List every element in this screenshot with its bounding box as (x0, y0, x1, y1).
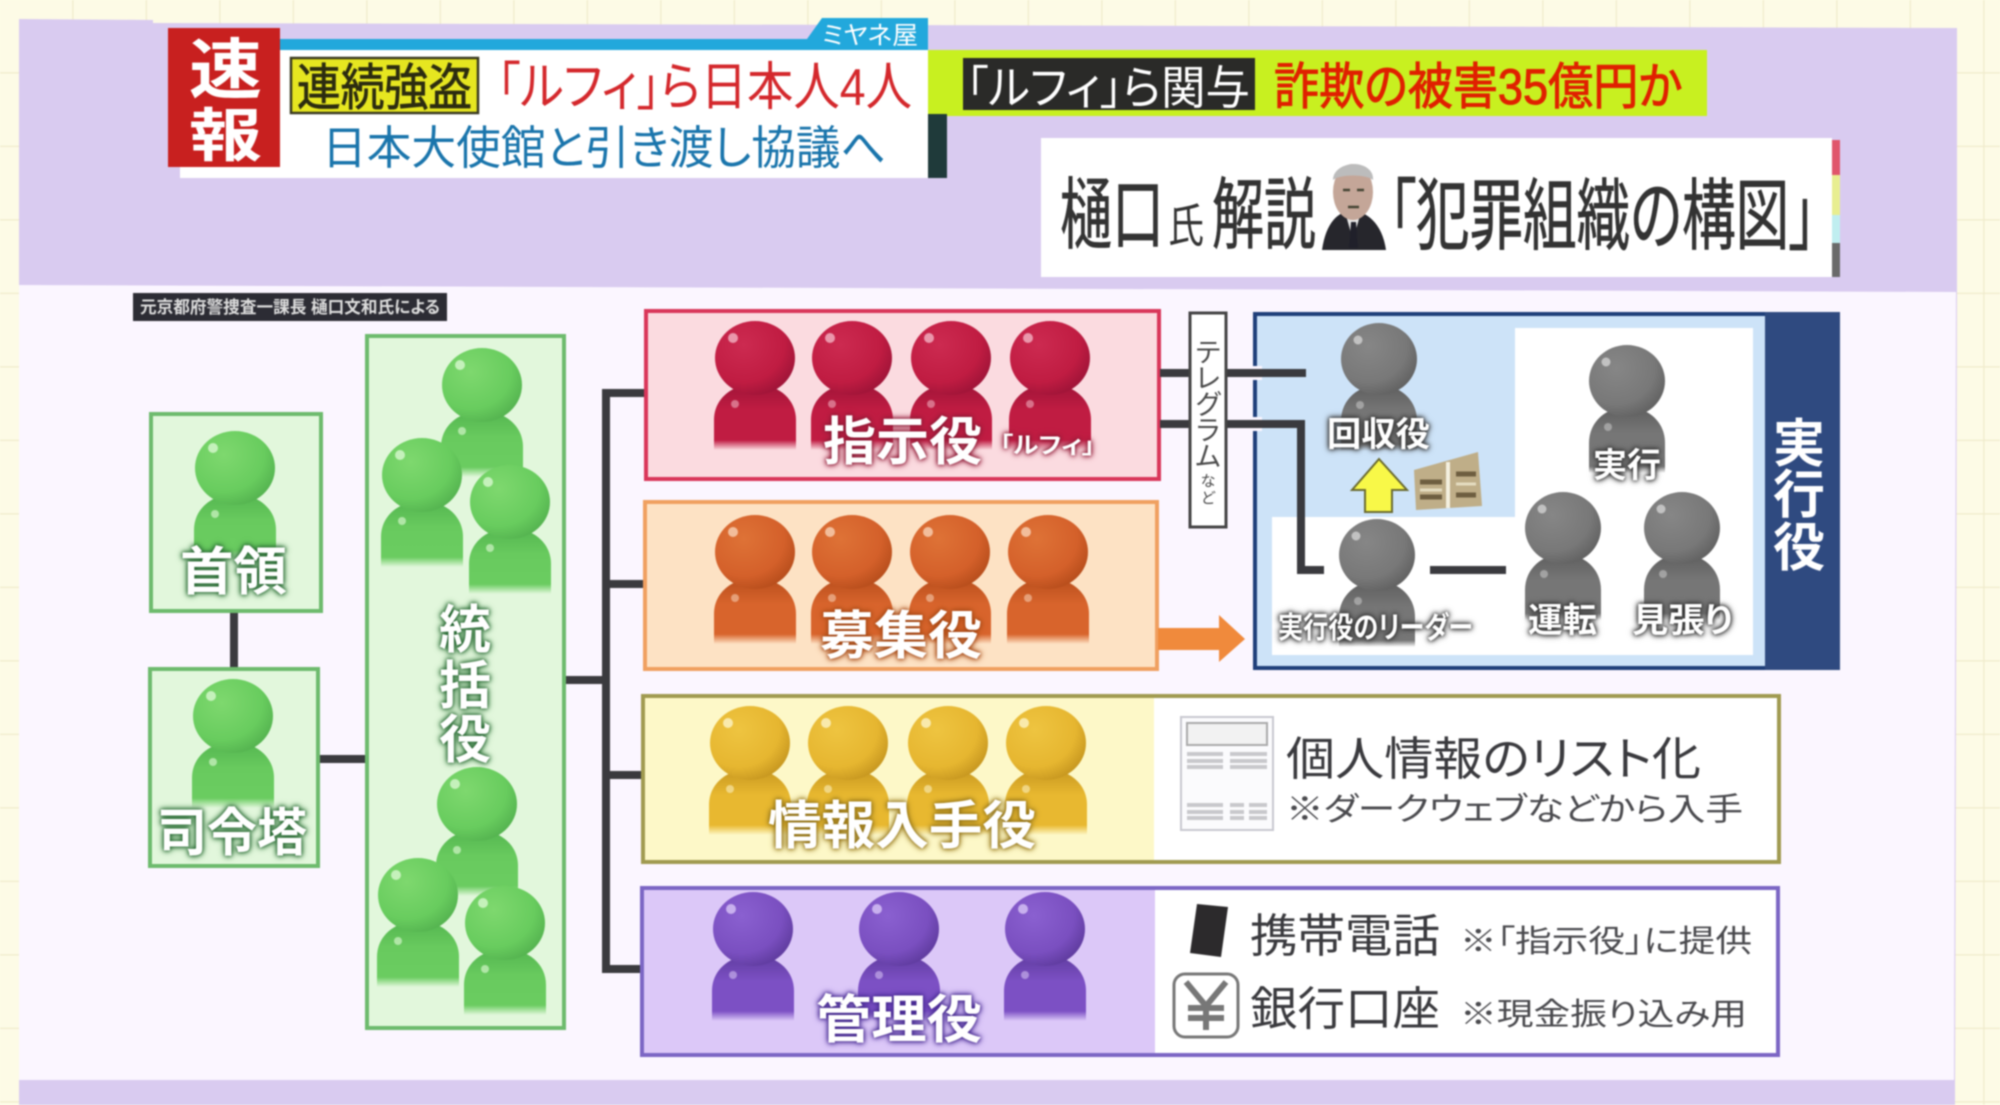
label: 募集役 (820, 608, 982, 666)
panel: recruiters (645, 502, 1157, 669)
icon: document list (1181, 717, 1273, 830)
executor leader (1278, 519, 1473, 647)
label: 首領 (180, 544, 287, 602)
ticker: lime side bar (928, 50, 1707, 116)
telegram box: テレグラム (1195, 338, 1221, 472)
connector lines of the organization (234, 393, 645, 969)
text: list of personal data: 個人情報のリスト化 (1286, 733, 1701, 785)
person icons (709, 706, 1087, 835)
lookout: 見張り (1632, 602, 1733, 640)
title: speaker name: 樋口 (1060, 171, 1164, 259)
label: 司令塔 (157, 805, 307, 863)
panel: boss (151, 414, 321, 611)
ticker: white banner (180, 50, 928, 178)
executors: navy side label: 実行役 (1773, 416, 1825, 578)
label: 管理役 (816, 992, 982, 1050)
label: 情報入手役 (768, 798, 1036, 856)
ticker: red breaking badge: 報 (189, 104, 262, 169)
label: Luffy note: 「ルフィ」 (1000, 432, 1095, 458)
text: mobile phones: 携帯電話 (1250, 910, 1440, 962)
title: portrait of speaker (1322, 164, 1386, 250)
text: phone note: ※「指示役」に提供 (1460, 924, 1752, 959)
title: honorific: 氏 (1168, 200, 1204, 252)
panel: managers (642, 888, 1778, 1055)
person icon (192, 679, 274, 808)
ticker: red headline: 「ルフィ」ら日本人4人 (497, 59, 912, 117)
title: subject: 「犯罪組織の構図」 (1389, 172, 1816, 260)
collector: 回収役 (1327, 416, 1430, 454)
icon: mobile phone (1190, 904, 1228, 957)
title: colored edge stripes (1832, 140, 1840, 277)
text: bank note: ※現金振り込み用 (1460, 997, 1747, 1032)
person icons (377, 348, 551, 1015)
executor leader: 実行役のリーダー (1278, 611, 1473, 645)
perpetrator: 実行 (1593, 447, 1661, 485)
ticker: program name: ミヤネ屋 (822, 22, 918, 50)
ticker: blue headline: 日本大使館と引き渡し協議へ (322, 122, 886, 174)
icon: banknotes (1414, 452, 1482, 510)
ticker: dark side bar (928, 114, 947, 178)
title panel (1041, 138, 1840, 277)
panel: instructors (646, 311, 1159, 479)
title: commentary word: 解説 (1212, 171, 1316, 259)
person icons (714, 515, 1089, 644)
perpetrator (1589, 345, 1665, 485)
driver (1525, 492, 1601, 640)
ticker: damage amount: 詐欺の被害35億円か (1274, 59, 1682, 115)
label: 指示役 (823, 414, 982, 472)
lookout (1632, 492, 1733, 640)
source note: 元京都府警捜査一課長 樋口文和氏による (140, 298, 440, 317)
arrow: recruiters to executors (1158, 615, 1245, 662)
panel: executors (1160, 312, 1840, 670)
text: bank accounts: 銀行口座 (1250, 983, 1440, 1035)
icon: bank account yen (1174, 974, 1238, 1037)
executors: white work area (1272, 328, 1753, 655)
panel: commander (150, 669, 318, 866)
collector (1327, 323, 1430, 454)
driver: 運転 (1528, 602, 1597, 640)
ticker: black tag: 「ルフィ」ら関与 (966, 62, 1250, 114)
ticker: red breaking badge (168, 28, 280, 169)
breaking news ticker (168, 18, 1707, 178)
arrow: cash up to collector (1352, 459, 1407, 512)
telegram box: など (1201, 473, 1216, 507)
ticker: red breaking badge: 速 (189, 33, 262, 107)
person icon (194, 431, 276, 560)
executors: navy side label (1765, 312, 1840, 670)
text: dark web note: ※ダークウェブなどから入手 (1286, 791, 1743, 827)
telegram box (1190, 313, 1226, 527)
panel: supervisors (367, 336, 564, 1028)
person icons (712, 892, 1086, 1021)
label: 統括役 (439, 602, 491, 770)
source note (133, 293, 447, 321)
ticker: case tag: 連続強盗 (297, 60, 472, 116)
connector lines to executors (1160, 373, 1506, 570)
person icons (714, 321, 1091, 450)
ticker: blue bar with tab (280, 18, 928, 50)
panel: information gatherers (643, 696, 1779, 862)
